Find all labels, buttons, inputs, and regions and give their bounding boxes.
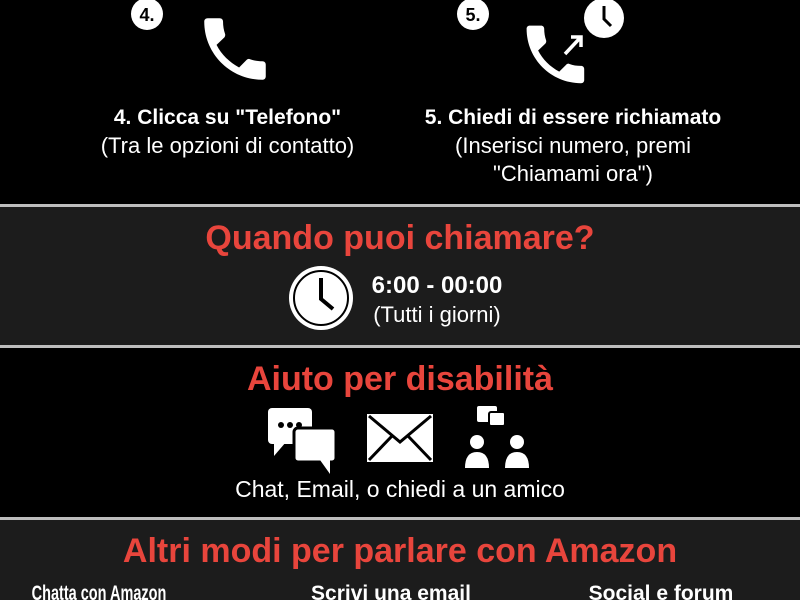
- text: disability options: Chat, Email, o chiedi a un amico: [235, 476, 565, 502]
- panel: steps 4 and 5: [0, 0, 800, 204]
- badge: 4: [131, 0, 163, 30]
- text: step 5: (Inserisci numero, premi: [455, 133, 691, 158]
- heading: other ways: Altri modi per parlare con Amazon: [123, 532, 677, 570]
- icon: clock: [289, 266, 353, 330]
- badge: 5: [457, 0, 489, 30]
- icon: phone: [204, 18, 266, 80]
- panel: other ways: [0, 520, 800, 600]
- text: step 5: [425, 106, 721, 186]
- panel: disability help: [0, 348, 800, 517]
- badge: 4: 4.: [139, 5, 154, 25]
- text: step 4: (Tra le opzioni di contatto): [101, 133, 354, 158]
- text: step 4: [101, 106, 354, 158]
- text: hours: 6:00 - 00:00: [372, 272, 502, 299]
- text: step 4: 4. Clicca su "Telefono": [114, 106, 341, 129]
- heading: disability help: Aiuto per disabilità: [247, 360, 553, 398]
- text: step 5: "Chiamami ora"): [493, 161, 653, 186]
- text: hours: (Tutti i giorni): [373, 302, 501, 327]
- icon: envelope: [367, 414, 433, 462]
- badge: 5: 5.: [465, 5, 480, 25]
- heading: when to call: Quando puoi chiamare?: [205, 219, 595, 257]
- icon: people talking: [465, 406, 529, 468]
- text: hours: [372, 272, 502, 327]
- icon: phone callback with clock: [526, 0, 624, 84]
- text: step 5: 5. Chiedi di essere richiamato: [425, 106, 721, 129]
- panel: when to call: [0, 207, 800, 345]
- icon: chat bubbles: [268, 408, 334, 474]
